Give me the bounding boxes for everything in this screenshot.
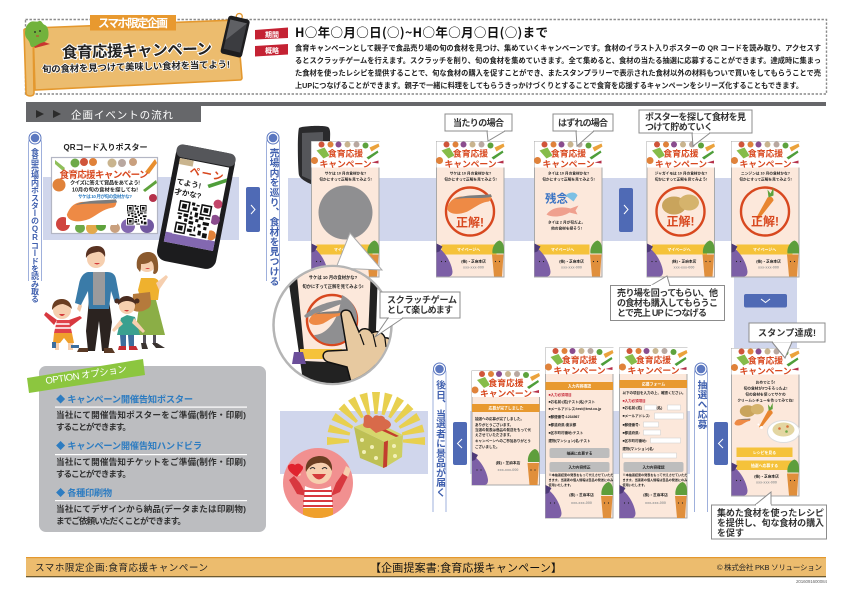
step 4 label bbox=[694, 363, 708, 512]
poster: entry finished: キャンペーンへのご参加ありがとう bbox=[475, 438, 531, 443]
poster: win: キャンペーン bbox=[444, 159, 497, 169]
section header bbox=[26, 102, 826, 122]
overview text: 食育キャンペーンとして親子で食品売り場の旬の食材を見つけ、集めていくキャンペーンです。食材のイラスト入りポスターの QR コードを読み取り、アクセスす bbox=[295, 42, 821, 52]
poster: lose: キャンペーン bbox=[542, 159, 595, 169]
poster: confirm form: ■メールアドレス:test@test.co.jp bbox=[548, 406, 601, 411]
poster: entry form: 建物(マンション)名: bbox=[622, 446, 654, 451]
footer bar bbox=[26, 557, 826, 577]
poster: win: 正解! bbox=[456, 214, 484, 230]
overview text: るとスクラッチゲームを行えます。スクラッチを削り、旬の食材を集めていきます。全て集めると、食材の当たる抽選に応募することができます。達成時に集まっ bbox=[295, 55, 821, 65]
poster: entry form: 以下の項目を入力の上、確認ください。 bbox=[622, 390, 686, 395]
callout: collect: ポスターを探して食材を見 bbox=[645, 111, 746, 122]
poster: potato: 旬かにすって正解を見てみよう! bbox=[655, 176, 707, 182]
option 1: ◆ キャンペーン開催告知ポスター bbox=[56, 394, 193, 404]
callout: sales up bbox=[610, 276, 724, 320]
callout: collect bbox=[639, 110, 752, 146]
poster: carrot: (株)・芝麻本店 bbox=[756, 258, 781, 264]
banner title: 食育応援キャンペーン bbox=[62, 39, 212, 62]
poster: confirm form: 入力内容確認 bbox=[568, 384, 591, 388]
poster: win: (株)・芝麻本店 bbox=[461, 258, 486, 264]
option ribbon: OPTION オプション bbox=[45, 364, 128, 387]
callout: collect: つけて貯めていく bbox=[645, 121, 713, 132]
poster: entry finished: xxx-xxx-000 bbox=[498, 468, 518, 472]
poster: potato: キャンペーン bbox=[655, 159, 707, 169]
callout: scratch game: として楽しめます bbox=[387, 304, 453, 315]
poster: win: マイページへ bbox=[457, 247, 480, 252]
option 1: 当社にて開催告知ポスターをご準備(制作・印刷) bbox=[56, 409, 246, 420]
poster: carrot: 食育応援 bbox=[748, 148, 783, 158]
small smartphone behind poster bbox=[298, 126, 330, 188]
overview text: た食材を使ったレシピを提供することで、旬な食材の購入を促すことができ、またスタンプラリーで表示された食材以外の材料もついで買いをしてもらうことで売 bbox=[295, 68, 821, 78]
callout: sales up: とで売上 UP につなげる bbox=[617, 307, 707, 318]
step 4 label: 抽選へ応募 bbox=[696, 379, 707, 430]
poster: entry finished: (株)・芝麻本店 bbox=[496, 460, 521, 465]
step 3 label bbox=[433, 363, 446, 512]
poster: carrot: ニンジンは 10 月の食材かな? bbox=[741, 170, 791, 176]
magnified scratch game bbox=[274, 266, 392, 388]
landscape QR poster: 食育応援キャンペーン bbox=[60, 169, 148, 181]
poster: lose: xxx-xxx-000 bbox=[561, 266, 582, 270]
dad bbox=[75, 246, 120, 353]
poster: scratch: 旬かにすって正解を見てみよう! bbox=[319, 176, 372, 182]
poster: scratch bbox=[311, 142, 380, 277]
callout: sales up: の食材も購入してもらうこ bbox=[617, 297, 718, 308]
poster: entry finished: ございました。 bbox=[475, 444, 500, 449]
poster: confirm form: 建物(マンション)名:テスト bbox=[548, 438, 591, 443]
document number: 2016091600084 bbox=[796, 579, 827, 584]
banner subtitle: 旬の食材を見つけて美味しい食材を当てよう! bbox=[42, 59, 230, 74]
icon: gift with rays bbox=[327, 392, 425, 468]
poster: confirm form: ※本抽選結果の発表をもって代えさせていただ bbox=[548, 472, 613, 477]
option 3: までご依頼いただくことができます。 bbox=[56, 515, 186, 526]
poster: lose bbox=[534, 142, 602, 277]
poster: entry form: 入力内容確認 bbox=[642, 464, 665, 470]
poster: confirm form: ■入力必須項目 bbox=[548, 392, 572, 397]
poster: entry finished: キャンペーン bbox=[480, 388, 532, 398]
callout: scratch game: スクラッチゲーム bbox=[387, 294, 457, 305]
landscape QR poster: クイズに答えて賞品をあてよう! bbox=[70, 178, 140, 186]
poster: entry form: きます。当選者の個人情報は賞品の発送にのみ bbox=[622, 477, 687, 482]
smartphone with QR: 才かな? bbox=[174, 186, 203, 201]
poster: entry form: (名) bbox=[656, 405, 662, 410]
option ribbon bbox=[27, 359, 145, 393]
callout: recipe: を促す bbox=[717, 527, 744, 538]
step 3 label: 後日、当選者に景品が届く bbox=[434, 379, 446, 497]
poster: carrot: 旬かにすって正解を見てみよう! bbox=[739, 176, 792, 182]
poster: win: 旬かにすって正解を見てみよう! bbox=[444, 176, 497, 182]
poster: confirm form: 使用いたします。 bbox=[548, 482, 573, 487]
header frame bbox=[26, 20, 826, 94]
footer left: スマホ限定企画:食育応援キャンペーン bbox=[35, 562, 208, 574]
poster: lose: タイは 10 月の食材かな? bbox=[548, 170, 590, 176]
poster: carrot: 正解! bbox=[751, 214, 779, 228]
poster: recipe: 旬の食材が3つそろったよ! bbox=[744, 386, 787, 390]
step 1 label bbox=[28, 132, 42, 303]
poster: entry finished: 当選の発表は商品の発送をもって代 bbox=[475, 427, 531, 432]
poster: recipe: レシピを見る bbox=[753, 450, 776, 455]
poster: entry form: ■都道府県: bbox=[622, 430, 640, 435]
poster: confirm form: 抽選に応募する bbox=[567, 450, 593, 456]
option 2: ◆ キャンペーン開催告知ハンドビラ bbox=[56, 440, 202, 451]
icon: pepper mascot bbox=[25, 21, 50, 48]
poster: recipe: おめでとう! bbox=[756, 380, 775, 384]
period text: H○年○月○日(○)~H○年○月○日(○)まで bbox=[295, 22, 548, 41]
poster: carrot: xxx-xxx-000 bbox=[758, 266, 779, 270]
poster: lose: 食育応援 bbox=[551, 148, 586, 158]
poster: entry finished: 応募が完了しました bbox=[488, 406, 524, 410]
poster: entry finished: 抽選への応募が完了しました。 bbox=[475, 416, 524, 421]
period label: 期間 bbox=[265, 30, 279, 39]
poster: confirm form: キャンペーン bbox=[554, 366, 606, 376]
boy bbox=[44, 299, 82, 350]
campaign tag: スマホ限定企画 bbox=[98, 16, 168, 30]
landscape QR poster bbox=[52, 158, 158, 234]
poster: potato: マイページへ bbox=[667, 247, 691, 252]
poster: potato: ジャガイモは 10 月の食材かな? bbox=[655, 170, 708, 176]
poster: scratch: サケは 10 月の食材かな? bbox=[325, 170, 367, 176]
banner scroll bbox=[24, 20, 242, 96]
option 3: 当社にてデザインから納品(データまたは印刷物) bbox=[56, 503, 246, 514]
poster: recipe: 食育応援 bbox=[748, 354, 783, 366]
poster: entry finished: ありがとうございます。 bbox=[475, 422, 513, 427]
poster: entry form bbox=[619, 348, 688, 518]
poster: confirm form bbox=[545, 348, 614, 518]
poster: confirm form: ■郵便番号:1234567 bbox=[548, 414, 579, 419]
magnifier connector bbox=[336, 233, 382, 270]
flow bands bbox=[43, 177, 798, 474]
poster: carrot bbox=[731, 142, 800, 277]
poster: confirm form: 入力内容修正 bbox=[568, 464, 591, 470]
section header: 企画イベントの流れ bbox=[71, 108, 174, 122]
period label bbox=[255, 28, 288, 40]
magnified scratch game: 旬かにすって正解を見てみよう! bbox=[302, 283, 364, 290]
poster: entry form: ■入力必須項目 bbox=[622, 398, 646, 403]
callout: stamp complete: スタンプ達成! bbox=[758, 327, 816, 338]
footer right: © 株式会社 PKB ソリューション bbox=[717, 562, 822, 572]
poster: potato: xxx-xxx-000 bbox=[674, 266, 694, 270]
landscape QR poster: サケは 10 月が旬の食材かな? bbox=[78, 193, 132, 200]
poster: entry finished bbox=[472, 371, 540, 485]
overview text bbox=[295, 42, 821, 90]
poster: recipe: (株)・芝麻本店 bbox=[754, 474, 779, 478]
poster: confirm form: ■区市町村番地:テスト bbox=[548, 430, 584, 435]
poster: entry form: xxx-xxx-000 bbox=[645, 501, 666, 505]
girl bbox=[112, 296, 145, 350]
poster: entry form: ■メールアドレス: bbox=[622, 413, 650, 418]
title banner bbox=[24, 11, 251, 96]
option 3: ◆ 各種印刷物 bbox=[56, 487, 112, 498]
callout: lose bbox=[553, 114, 613, 146]
landscape QR poster: 10月の旬の食材を探してね! bbox=[72, 186, 138, 194]
smartphone with QR: てよう! bbox=[176, 176, 202, 191]
poster: lose: (株)・芝麻本店 bbox=[559, 258, 584, 264]
poster: carrot: マイページへ bbox=[753, 247, 776, 252]
poster: potato: 正解! bbox=[666, 214, 694, 228]
poster: entry form: ※本抽選結果の発表をもって代えさせていただ bbox=[622, 472, 687, 477]
poster: recipe: xxx-xxx-000 bbox=[756, 480, 777, 484]
poster: entry form: キャンペーン bbox=[628, 366, 680, 376]
poster: entry form: ■郵便番号: bbox=[622, 422, 640, 427]
poster: entry form: 食育応援 bbox=[636, 354, 671, 365]
step 2 label: 売場内を巡り、食材を見つける bbox=[268, 147, 279, 286]
option 2: することができます。 bbox=[56, 468, 131, 479]
poster: confirm form: (株)・芝麻本店 bbox=[569, 492, 594, 497]
poster: scratch: (株)・芝麻本店 bbox=[339, 260, 364, 264]
overview label bbox=[255, 44, 288, 56]
poster: win: xxx-xxx-000 bbox=[463, 266, 484, 270]
icon: smartphone bbox=[220, 11, 251, 58]
smartphone with QR bbox=[155, 143, 237, 271]
poster: entry form: 使用いたします。 bbox=[622, 482, 647, 487]
poster: entry form: ■お名前:(姓) bbox=[622, 405, 642, 410]
panel: option bbox=[27, 359, 266, 532]
poster: confirm form: xxx-xxx-000 bbox=[571, 501, 592, 505]
poster: entry finished: 食育応援 bbox=[488, 377, 524, 388]
poster: potato: 食育応援 bbox=[663, 148, 699, 158]
poster: recipe: クリームシチューを作ってみてね! bbox=[737, 398, 794, 402]
poster: win: 食育応援 bbox=[453, 148, 488, 158]
callout: recipe: 集めた食材を使ったレシピ bbox=[717, 507, 824, 518]
poster: confirm form: ■都道府県:東京都 bbox=[548, 422, 577, 427]
callout: stamp complete bbox=[749, 323, 825, 358]
poster: scratch: マイページへ bbox=[334, 247, 357, 252]
poster: entry form: (株)・芝麻本店 bbox=[643, 492, 668, 497]
chevron buttons bbox=[246, 187, 787, 465]
overview text: 上UPにつなげることができます。親子で一緒に料理をしてもらうきっかけづくりとすることで食育を応援するキャンペーンをシリーズ化することもできます。 bbox=[295, 80, 803, 90]
poster: lose: 他の食材を探そう! bbox=[551, 226, 582, 230]
poster: confirm form: 食育応援 bbox=[562, 354, 597, 365]
poster: recipe: 旬の食材を使ってサケの bbox=[745, 392, 786, 396]
QR poster caption: QRコード入りポスター bbox=[64, 142, 148, 152]
callout: recipe bbox=[712, 492, 826, 539]
step 1 label: 食品売場内ポスターのQRコードを読み取る bbox=[30, 147, 40, 303]
poster: lose: マイページへ bbox=[551, 247, 574, 252]
overview label: 概略 bbox=[265, 46, 279, 55]
poster: entry form: 応募フォーム bbox=[642, 382, 665, 386]
poster: win bbox=[436, 142, 504, 277]
callout: win: 当たりの場合 bbox=[453, 117, 504, 128]
mom bbox=[132, 252, 168, 349]
callout: win bbox=[445, 114, 512, 141]
callout: sales up: 売り場を回ってもらい、他 bbox=[617, 287, 718, 298]
poster: win: サケは 10 月の食材かな? bbox=[450, 170, 492, 176]
illustration: family bbox=[44, 246, 168, 353]
poster: potato bbox=[646, 142, 715, 277]
magnified scratch game: サケは 10 月の食材かな? bbox=[309, 274, 358, 281]
campaign tag bbox=[90, 15, 176, 30]
callout: scratch game bbox=[375, 292, 460, 337]
poster: confirm form: きます。当選者の個人情報は賞品の発送にのみ bbox=[548, 477, 613, 482]
option 1: することができます。 bbox=[56, 421, 131, 432]
smartphone with QR: ペーン bbox=[189, 165, 224, 184]
poster: recipe: キャンペーン bbox=[740, 366, 792, 376]
poster: confirm form: ■お名前:(姓)テスト(名)テスト bbox=[548, 399, 595, 404]
option 3 bbox=[55, 487, 247, 526]
poster: carrot: キャンペーン bbox=[740, 159, 792, 169]
poster: lose: 残念 bbox=[545, 192, 568, 206]
poster: lose: タイは 2 月が旬だよ。 bbox=[548, 220, 585, 224]
poster: potato: (株)・芝麻本店 bbox=[672, 258, 697, 264]
option 1 bbox=[55, 394, 247, 432]
option 2: 当社にて開催告知チケットをご準備(制作・印刷) bbox=[56, 456, 246, 467]
footer center: 【企画提案書:食育応援キャンペーン】 bbox=[370, 560, 562, 574]
illustration: happy child bbox=[283, 448, 353, 520]
poster: recipe: 抽選へ応募する bbox=[751, 463, 778, 468]
poster: scratch: キャンペーン bbox=[320, 159, 372, 169]
poster: scratch: 食育応援 bbox=[328, 148, 363, 158]
poster: entry form: ■区市町村番地: bbox=[622, 438, 647, 443]
callout: lose: はずれの場合 bbox=[558, 117, 608, 128]
callout: recipe: を提供し、旬な食材の購入 bbox=[717, 517, 824, 528]
poster: lose: 旬かにすって正解を見てみよう! bbox=[542, 176, 595, 182]
poster: entry finished: えさせていただきます。 bbox=[475, 432, 513, 437]
option 2 bbox=[55, 440, 247, 479]
option background bbox=[39, 366, 266, 532]
poster: recipe bbox=[731, 348, 800, 496]
